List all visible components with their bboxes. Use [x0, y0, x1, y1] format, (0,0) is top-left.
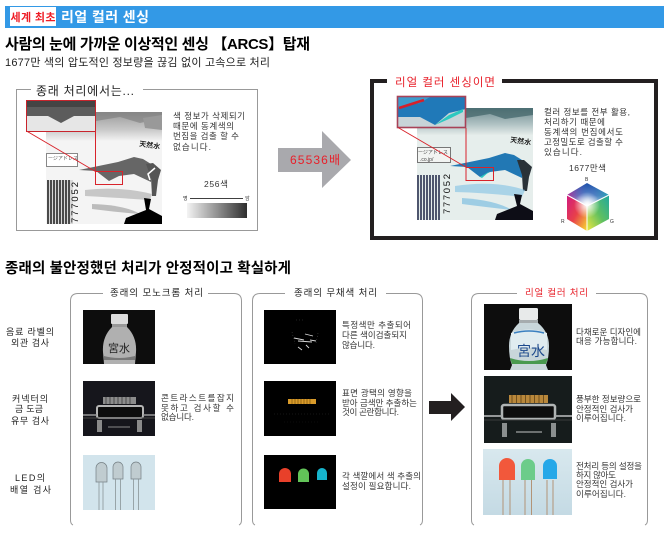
row labels: [6, 327, 54, 495]
icon: RGB colour cube: R: [561, 219, 565, 225]
panel text: [173, 111, 245, 152]
colour label photo: ージアドレス: [418, 150, 448, 156]
heading: ARCS: 사람의 눈에 가까운 이상적인 센싱 【ARCS】탑재: [5, 36, 310, 53]
panel label: 리얼 컬러 센싱이면: [395, 75, 495, 89]
panel text: 하지 않아도: [576, 470, 616, 480]
panel: real colour sensing: [372, 75, 656, 238]
photo: colour bottle: [484, 304, 572, 370]
panel label: 종래의 모노크롬 처리: [110, 287, 203, 299]
photo: colour LEDs: [483, 449, 572, 515]
panel text: 못하고 검사할 수: [161, 403, 234, 413]
header title: 리얼 컬러 센싱: [61, 9, 149, 25]
panel text: 설정이 필요합니다.: [342, 481, 411, 491]
grayscale label photo: 777052: [70, 182, 81, 223]
icon: RGB colour cube: B: [585, 177, 589, 183]
panel text: 풍부한 정보량으로: [576, 394, 641, 404]
panel text: 처리하기 때문에: [544, 117, 605, 127]
panel text: 없습니다.: [161, 412, 194, 422]
callout lines: [398, 128, 494, 180]
subheading: 1677만 색의 압도적인 정보량을 끊김 없이 고속으로 처리: [5, 56, 270, 69]
photo: mono LEDs: [83, 455, 155, 510]
grayscale legend: 256색: [204, 179, 228, 189]
photo: extracted LEDs: [264, 455, 336, 509]
colour label photo: [417, 108, 533, 220]
panel text: 안정적인 검사가: [576, 404, 633, 414]
panel text: 다채로운 디자인에: [576, 327, 641, 337]
colour count: 1677만색: [569, 163, 606, 173]
panel text: 이루어집니다.: [576, 413, 626, 423]
panel text: 없습니다.: [173, 142, 211, 152]
grayscale label photo: ージアドレス: [48, 156, 78, 162]
heading: stable processing: 종래의 불안정했던 처리가 안정적이고 확실하게: [5, 260, 291, 277]
panel: achromatic processing: [252, 287, 422, 525]
panel text: 전처리 등의 설정을: [576, 461, 642, 471]
panel text: 특정색만 추출되어: [342, 320, 411, 330]
panel text: 다른 색이검출되지: [342, 330, 407, 340]
icon: RGB colour cube: G: [610, 219, 614, 225]
row labels: 외관 검사: [11, 337, 50, 348]
photo: extracted bottle: [264, 310, 336, 364]
panel text: 동계색의 번짐에서도: [544, 127, 623, 137]
colour label photo: 777052: [442, 174, 453, 214]
panel label: 종래의 무채색 처리: [294, 287, 377, 299]
row labels: LED의: [15, 473, 45, 483]
panel label: 종래 처리에서는...: [36, 84, 134, 98]
panel text: 고정밀도로 검출할 수: [544, 137, 623, 147]
row labels: 배열 검사: [10, 484, 52, 495]
photo: mono bottle: [83, 310, 155, 364]
panel text: 것이 곤란합니다.: [342, 407, 399, 417]
panel text: 있습니다.: [544, 147, 582, 157]
panel text: 대응 가능합니다.: [576, 336, 637, 346]
row labels: 커넥터의: [12, 394, 48, 404]
callout lines: [26, 131, 122, 184]
badge: world first: 세계 최초: [10, 10, 56, 24]
panel: conventional processing: [16, 84, 258, 230]
panel text: [161, 393, 234, 422]
header bar: [5, 6, 664, 28]
arrow: 65536x: [278, 131, 351, 188]
grayscale legend: [183, 179, 250, 218]
panel text: 않습니다.: [342, 340, 375, 350]
grayscale label photo: [46, 112, 162, 224]
panel text: 받아 금색만 추출하는: [342, 398, 417, 408]
panel text: 콘트라스트를잡지: [161, 393, 234, 403]
panel text: [576, 327, 642, 499]
badge: world first: [10, 7, 56, 26]
panel: real colour processing: [472, 287, 648, 525]
grayscale label photo: 天然水: [139, 139, 161, 151]
panel text: [342, 320, 421, 491]
row labels: 금 도금: [15, 404, 43, 414]
panel label: 리얼 컬러 처리: [525, 287, 588, 299]
inset zoom: [397, 96, 466, 128]
panel text: 이루어집니다.: [576, 489, 626, 499]
photo: mono connector: [83, 381, 155, 436]
colour label photo: .co.jp/: [420, 157, 434, 163]
panel: monochrome processing: [70, 287, 242, 525]
panel text: 표면 광택의 영향을: [342, 388, 412, 398]
inset zoom: [26, 100, 96, 132]
row labels: 유무 검사: [11, 415, 50, 426]
photo: colour bottle: 宮水: [517, 343, 545, 359]
panel text: 각 색깔에서 색 추출의: [342, 471, 421, 481]
colour label photo: 天然水: [510, 135, 532, 147]
photo: extracted connector: [264, 381, 336, 436]
panel text: 번짐을 검출 할 수: [173, 131, 239, 141]
arrow: to real colour: [429, 393, 465, 421]
photo: colour connector: [484, 376, 572, 443]
panel text: 때문에 동계색의: [173, 121, 234, 131]
grayscale legend: 명: [183, 195, 188, 202]
panel text: 안정적인 검사가: [576, 479, 633, 489]
grayscale legend: 암: [245, 195, 250, 202]
panel text: 색 정보가 삭제되기: [173, 111, 245, 121]
panel text: 컬러 정보를 전부 활용,: [544, 107, 630, 117]
arrow: 65536x: 65536배: [290, 153, 340, 167]
row labels: 음료 라벨의: [6, 327, 54, 337]
icon: RGB colour cube: [561, 177, 614, 231]
panel text: [544, 107, 630, 157]
photo: mono bottle: 宮水: [108, 342, 130, 355]
